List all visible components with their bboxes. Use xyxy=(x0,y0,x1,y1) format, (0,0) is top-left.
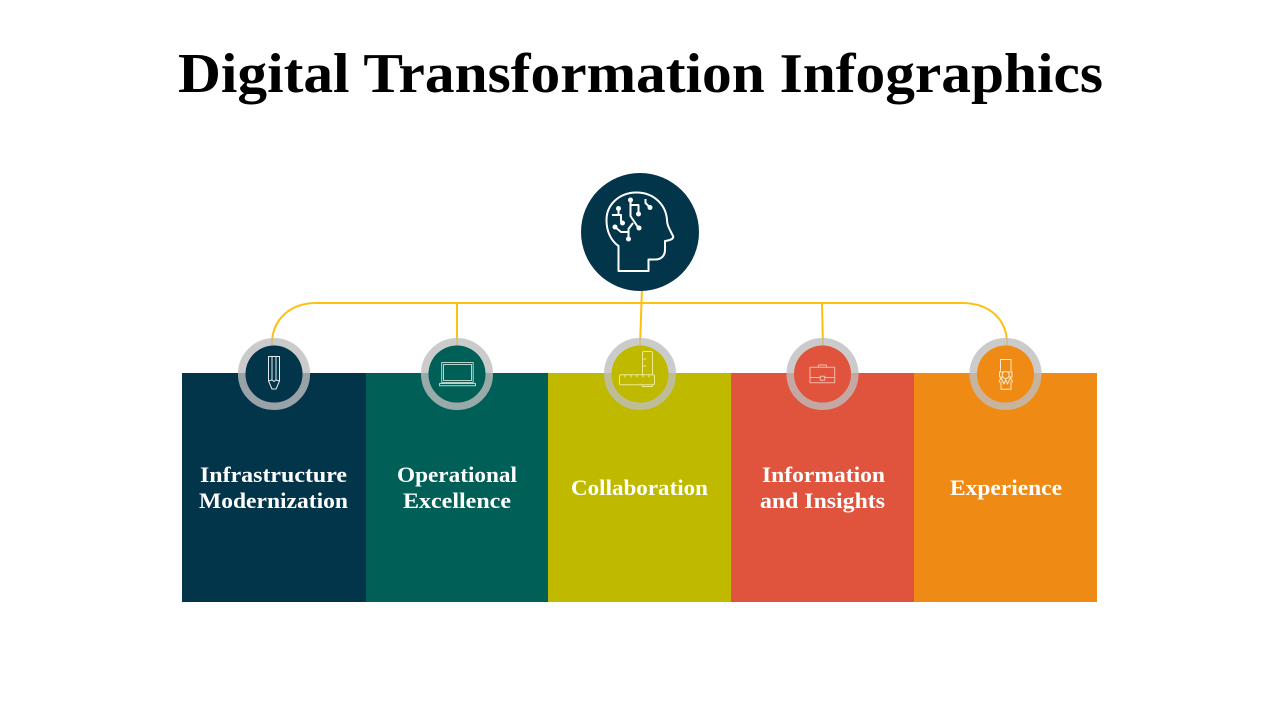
panel: Collaboration xyxy=(548,373,731,602)
label: Operational Excellence xyxy=(397,462,517,513)
label: Infrastructure Modernization xyxy=(199,462,348,513)
label: Operational Excellence: Operational xyxy=(397,462,517,487)
icon: laptop xyxy=(440,362,476,386)
badge: certificate xyxy=(973,342,1038,406)
badge: pencil xyxy=(242,342,306,406)
label: Infrastructure Modernization: Modernization xyxy=(199,488,348,513)
label: Infrastructure Modernization: Infrastructure xyxy=(200,462,347,487)
icon: certificate xyxy=(999,360,1012,389)
label: Information and Insights xyxy=(760,462,885,513)
central brain icon xyxy=(581,173,699,291)
icon: briefcase xyxy=(810,365,835,383)
badge: briefcase xyxy=(790,342,855,406)
panel: Operational Excellence xyxy=(366,373,548,602)
panel: Experience xyxy=(914,373,1097,602)
icon: pencil xyxy=(268,356,280,389)
connector lines xyxy=(272,288,1007,346)
icon: rulers xyxy=(620,352,654,386)
label: Operational Excellence: Excellence xyxy=(403,488,511,513)
label: Information and Insights: and Insights xyxy=(760,488,885,513)
label: Experience: Experience xyxy=(950,475,1062,500)
badge: rulers xyxy=(608,342,672,406)
panel: Infrastructure Modernization xyxy=(182,373,366,602)
panel: Information and Insights xyxy=(731,373,914,602)
colored columns xyxy=(182,373,1097,602)
label: Information and Insights: Information xyxy=(762,462,885,487)
title: Digital Transformation Infographics xyxy=(178,43,1103,105)
badge: laptop xyxy=(425,342,489,406)
label: Collaboration: Collaboration xyxy=(571,475,708,500)
